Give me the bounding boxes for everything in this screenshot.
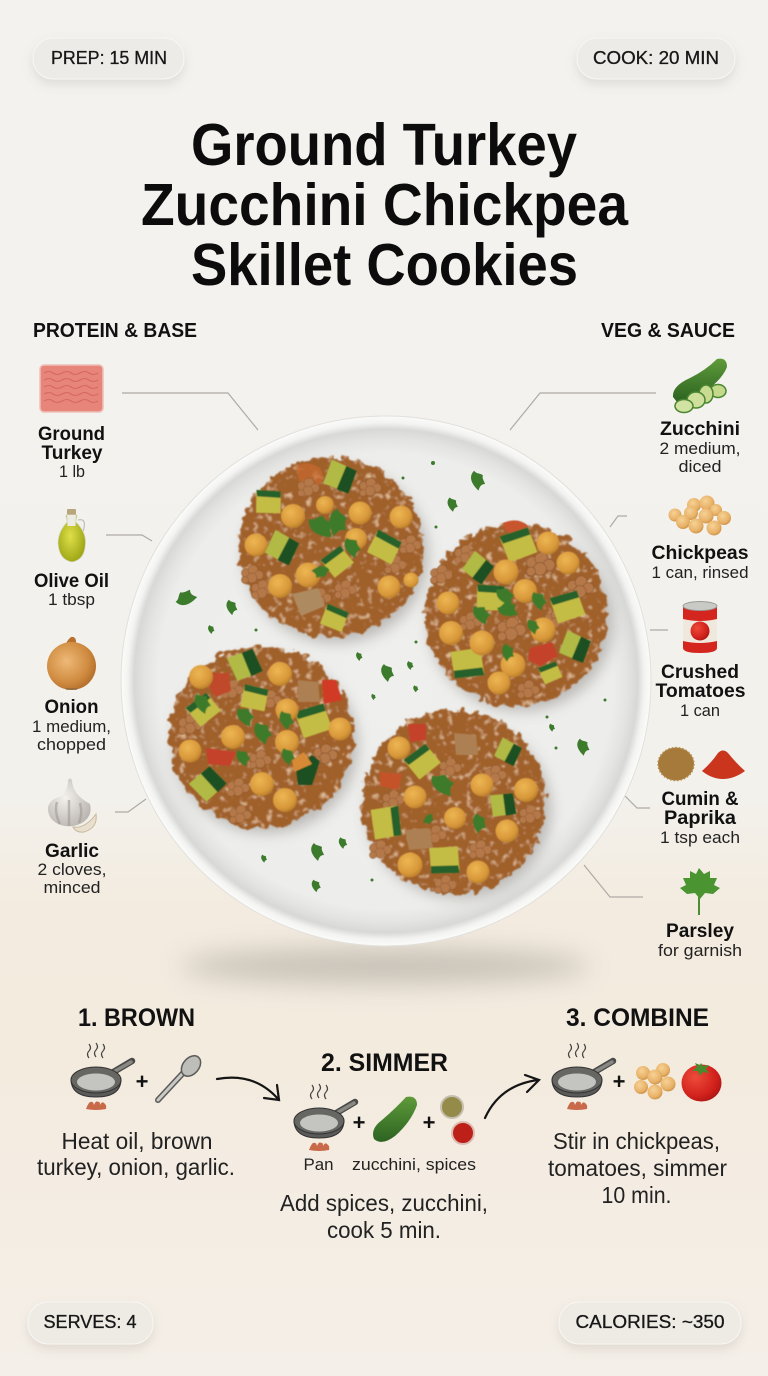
icon: paprika mound: [702, 750, 745, 779]
icon: oil bottle: [58, 509, 86, 562]
label: olive oil: [34, 571, 109, 609]
title: [141, 112, 629, 298]
ingredient: onion: [32, 637, 111, 754]
icon: pan: [71, 1043, 132, 1110]
ingredient: zucchini: [660, 359, 740, 476]
label: ground turkey: [38, 424, 105, 481]
ingredient: cumin and paprika: [658, 748, 745, 847]
plate: [121, 416, 651, 946]
icon: zucchini with slices: [673, 359, 727, 412]
ingredient: crushed tomatoes: [656, 602, 746, 720]
arrow: step 1 to step 2: [217, 1078, 279, 1100]
pill: cook time: [577, 38, 735, 79]
pill: serves: [28, 1302, 153, 1344]
label: cumin and paprika: [660, 789, 740, 847]
captions: Pan: [304, 1155, 334, 1174]
label: chickpeas: 1 can, rinsed: [652, 563, 748, 582]
step 1 description: turkey, onion, garlic.: [37, 1154, 235, 1180]
icon: spoon: [158, 1052, 205, 1100]
step 3 description: 10 min.: [602, 1182, 672, 1208]
label: cumin and paprika: Cumin &: [662, 789, 739, 810]
ingredient: parsley: [658, 868, 742, 960]
label: parsley: Parsley: [666, 921, 734, 942]
step 1: brown: [37, 1004, 235, 1180]
heading: protein and base: PROTEIN & BASE: [33, 320, 197, 342]
label: chickpeas: Chickpeas: [652, 543, 748, 564]
label: parsley: for garnish: [658, 941, 742, 960]
icon: cumin mound: [658, 748, 694, 780]
patty: bottom left: [169, 646, 353, 828]
patty: top left: [239, 457, 423, 637]
label: garlic: [38, 841, 106, 897]
step 2 description: Add spices, zucchini,: [280, 1190, 488, 1216]
label: zucchini: 2 medium,: [660, 439, 740, 458]
icon: garlic bulb: [48, 778, 96, 832]
title: Ground Turkey: [191, 112, 577, 178]
ingredient: ground turkey: [38, 365, 105, 481]
icon: pan: [294, 1084, 355, 1151]
step 1 description: Heat oil, brown: [62, 1128, 212, 1154]
icon: tomato can: [683, 602, 717, 653]
label: onion: 1 medium,: [32, 717, 111, 736]
pill: calories: CALORIES: ~350: [576, 1312, 724, 1332]
icon: plus: +: [353, 1110, 365, 1135]
label: cumin and paprika: Paprika: [664, 808, 736, 829]
pill: cook time: COOK: 20 MIN: [593, 48, 719, 68]
heading: step 1: 1. BROWN: [78, 1004, 195, 1032]
step 3: combine: [548, 1004, 727, 1208]
title: Skillet Cookies: [191, 232, 578, 298]
label: olive oil: Olive Oil: [34, 571, 109, 592]
arrow: step 2 to step 3: [485, 1075, 539, 1118]
label: crushed tomatoes: Tomatoes: [656, 681, 746, 702]
label: onion: [32, 697, 111, 754]
label: onion: Onion: [44, 697, 98, 718]
patty: bottom right: [362, 710, 546, 894]
label: onion: chopped: [37, 735, 106, 754]
pill: prep time: PREP: 15 MIN: [51, 48, 167, 68]
icon: zucchini: [373, 1097, 417, 1142]
parsley sprinkles: [176, 461, 606, 892]
label: zucchini: [660, 419, 740, 476]
ingredient: garlic: [38, 778, 106, 897]
label: chickpeas: [652, 543, 748, 582]
ingredient: chickpeas: [652, 496, 748, 582]
icon: ground turkey pack: [40, 365, 103, 412]
label: crushed tomatoes: [656, 662, 746, 720]
icon: chickpeas: [634, 1063, 676, 1100]
icon: plus: +: [136, 1069, 148, 1094]
label: olive oil: 1 tbsp: [48, 590, 95, 609]
label: crushed tomatoes: Crushed: [661, 662, 739, 683]
step 2: simmer: [280, 1049, 488, 1243]
icon: chickpeas pile: [668, 496, 731, 536]
label: garlic: Garlic: [45, 841, 99, 862]
icon: plus: +: [423, 1110, 435, 1135]
heading: veg and sauce: VEG & SAUCE: [601, 320, 735, 342]
label: zucchini: diced: [678, 457, 722, 476]
label: ground turkey: 1 lb: [59, 462, 85, 481]
step 1 description: [37, 1128, 235, 1180]
label: garlic: 2 cloves,: [38, 860, 106, 879]
patty: top right: [425, 520, 607, 706]
label: ground turkey: Ground: [38, 424, 105, 445]
patty shadows: [174, 467, 613, 898]
step 2: simmer: zucchini, spices: [352, 1155, 476, 1174]
plate shadow: [180, 948, 590, 984]
icon: plus: +: [613, 1069, 625, 1094]
icon: parsley sprig: [680, 868, 720, 915]
heading: step 2: 2. SIMMER: [321, 1049, 448, 1077]
step 2 description: [280, 1190, 488, 1243]
ingredient: olive oil: [34, 509, 109, 609]
icon: tomato: [682, 1063, 722, 1102]
pill: prep time: [33, 38, 184, 79]
icon: spice bowls: [441, 1096, 474, 1144]
label: parsley: [658, 921, 742, 960]
leader lines: [106, 393, 668, 897]
label: cumin and paprika: 1 tsp each: [660, 828, 740, 847]
label: zucchini: Zucchini: [660, 419, 740, 440]
heading: step 3: 3. COMBINE: [566, 1004, 709, 1032]
step 3 description: Stir in chickpeas,: [553, 1128, 720, 1154]
step 2 description: cook 5 min.: [327, 1217, 441, 1243]
pill: calories: [559, 1302, 741, 1344]
title: Zucchini Chickpea: [141, 172, 629, 238]
step 3 description: [548, 1128, 727, 1208]
step 3 description: tomatoes, simmer: [548, 1155, 727, 1181]
pill: serves: SERVES: 4: [44, 1312, 136, 1332]
label: garlic: minced: [44, 878, 100, 897]
label: crushed tomatoes: 1 can: [680, 701, 720, 720]
icon: onion: [47, 637, 96, 690]
icon: pan: [552, 1043, 613, 1110]
label: ground turkey: Turkey: [42, 443, 103, 464]
